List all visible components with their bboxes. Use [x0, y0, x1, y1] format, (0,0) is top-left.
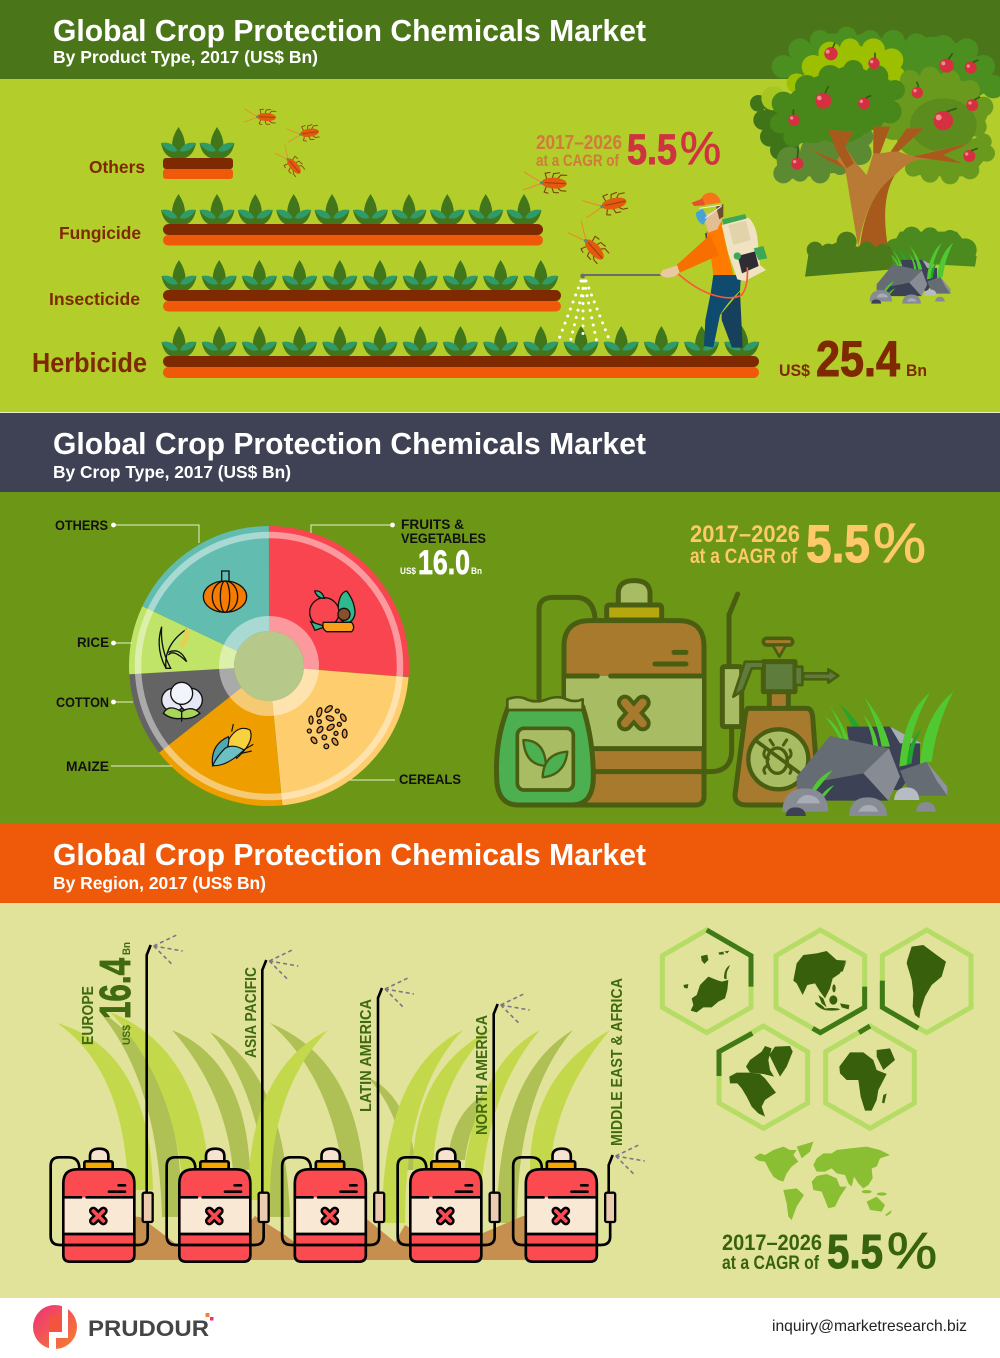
row: herbicide	[32, 326, 759, 378]
pie labels: MAIZE	[66, 758, 109, 774]
cagr callout: crop type: 2017–2026	[690, 521, 800, 548]
pie labels: FRUITS &	[401, 516, 464, 532]
region labels: NORTH AMERICA	[474, 1015, 491, 1135]
row: insecticide	[49, 260, 561, 312]
cagr callout: crop type: at a CAGR of	[690, 545, 798, 568]
region labels	[80, 942, 626, 1146]
label: herbicide: Herbicide	[32, 347, 147, 378]
region labels: ASIA PACIFIC	[243, 967, 260, 1058]
pie labels: VEGETABLES	[401, 530, 486, 546]
cagr callout: region: 5.5	[827, 1226, 883, 1279]
cagr callout: region: %	[887, 1222, 937, 1279]
header band: product type	[0, 0, 1000, 79]
region labels: Bn	[121, 942, 133, 955]
panel: by region	[0, 823, 1000, 1298]
pie labels: OTHERS	[55, 517, 108, 533]
sprayer: north america	[398, 994, 530, 1262]
sprayer: latin america	[282, 978, 414, 1262]
title: region: Global Crop Protection Chemicals Market	[53, 837, 646, 872]
illustration: apple tree	[750, 27, 1000, 250]
market size callout: herbicide: Bn	[906, 361, 927, 380]
value callout: fruits and vegetables: US$	[400, 566, 417, 577]
title: product type: Global Crop Protection Chemicals Market	[53, 13, 646, 48]
logo: prudour: PRUDOUR	[88, 1316, 209, 1341]
panel: by product type	[0, 0, 1000, 412]
market size callout: herbicide: 25.4	[816, 331, 900, 387]
header band: crop type	[0, 413, 1000, 492]
icon: fruit and vegetables	[310, 591, 355, 632]
illustration: grass blades	[57, 1010, 610, 1223]
hexagon: asia pacific	[776, 930, 865, 1033]
region labels: LATIN AMERICA	[358, 999, 375, 1112]
footer	[0, 1298, 1000, 1358]
pie chart: crop type share	[138, 535, 400, 797]
subtitle: region: By Region, 2017 (US$ Bn)	[53, 873, 266, 893]
market size callout: herbicide	[779, 331, 927, 387]
market size callout: herbicide: US$	[779, 361, 811, 380]
cagr callout: crop type	[690, 511, 926, 574]
illustration: bushes and rocks	[805, 227, 977, 304]
hexagon: middle east and africa	[826, 1026, 914, 1128]
label: fungicide: Fungicide	[59, 223, 141, 243]
illustration: sprayer tank, pesticide bag, bottle, rocks	[496, 581, 953, 816]
cagr callout: product type: 5.5	[627, 126, 677, 174]
cagr callout: crop type: %	[873, 511, 926, 574]
subtitle: crop type: By Crop Type, 2017 (US$ Bn)	[53, 462, 291, 482]
region labels: US$	[121, 1025, 133, 1045]
cagr callout: region: at a CAGR of	[722, 1253, 820, 1274]
header band: region	[0, 823, 1000, 903]
value callout: fruits and vegetables: Bn	[471, 566, 482, 577]
logo: prudour	[33, 1305, 214, 1349]
pie icons	[159, 571, 355, 766]
icon: pumpkin	[203, 571, 247, 612]
icon: cereal grains	[307, 704, 347, 749]
title: crop type: Global Crop Protection Chemicals Market	[53, 426, 646, 461]
value callout: fruits and vegetables: 16.0	[418, 544, 470, 582]
pie leader lines	[111, 525, 395, 780]
cagr callout: product type: at a CAGR of	[536, 151, 619, 170]
contact email: inquiry@marketresearch.biz	[772, 1318, 967, 1335]
subtitle: product type: By Product Type, 2017 (US$ Bn)	[53, 47, 318, 67]
region labels: 16.4	[91, 958, 140, 1019]
spray mist	[559, 281, 609, 343]
world map	[754, 1142, 892, 1220]
cagr callout: region	[722, 1222, 937, 1279]
cagr callout: product type: 2017–2026	[536, 132, 622, 154]
hexagon: north america	[719, 1026, 808, 1128]
sprayer: europe	[51, 935, 183, 1262]
cagr callout: product type: %	[680, 122, 721, 174]
label: others: Others	[89, 157, 145, 177]
sprayers with wands	[51, 935, 645, 1262]
hexagon: latin america	[882, 930, 971, 1033]
label: insecticide: Insecticide	[49, 289, 140, 309]
pie labels: CEREALS	[399, 771, 461, 787]
sprayer: middle east and africa	[513, 1145, 645, 1262]
region hexagons and maps	[662, 930, 971, 1220]
icons: cockroaches	[244, 108, 629, 266]
illustration: farmer spraying	[580, 193, 767, 348]
hexagon: europe	[662, 930, 751, 1033]
row: fungicide	[59, 194, 543, 246]
icon: cotton	[162, 682, 202, 722]
pie labels: RICE	[77, 634, 109, 650]
cagr callout: product type	[536, 122, 721, 174]
cagr callout: region: 2017–2026	[722, 1230, 822, 1255]
icon: maize	[212, 724, 253, 766]
icon: rice	[159, 627, 187, 668]
illustration: soil	[125, 1216, 595, 1260]
panel: by crop type	[0, 413, 1000, 823]
pie labels	[55, 516, 486, 787]
pie labels: COTTON	[56, 694, 109, 710]
region labels: EUROPE	[80, 986, 97, 1045]
row: others	[89, 127, 234, 179]
region labels: MIDDLE EAST & AFRICA	[609, 978, 626, 1146]
sprayer: asia pacific	[167, 950, 298, 1262]
cagr callout: crop type: 5.5	[806, 515, 870, 574]
